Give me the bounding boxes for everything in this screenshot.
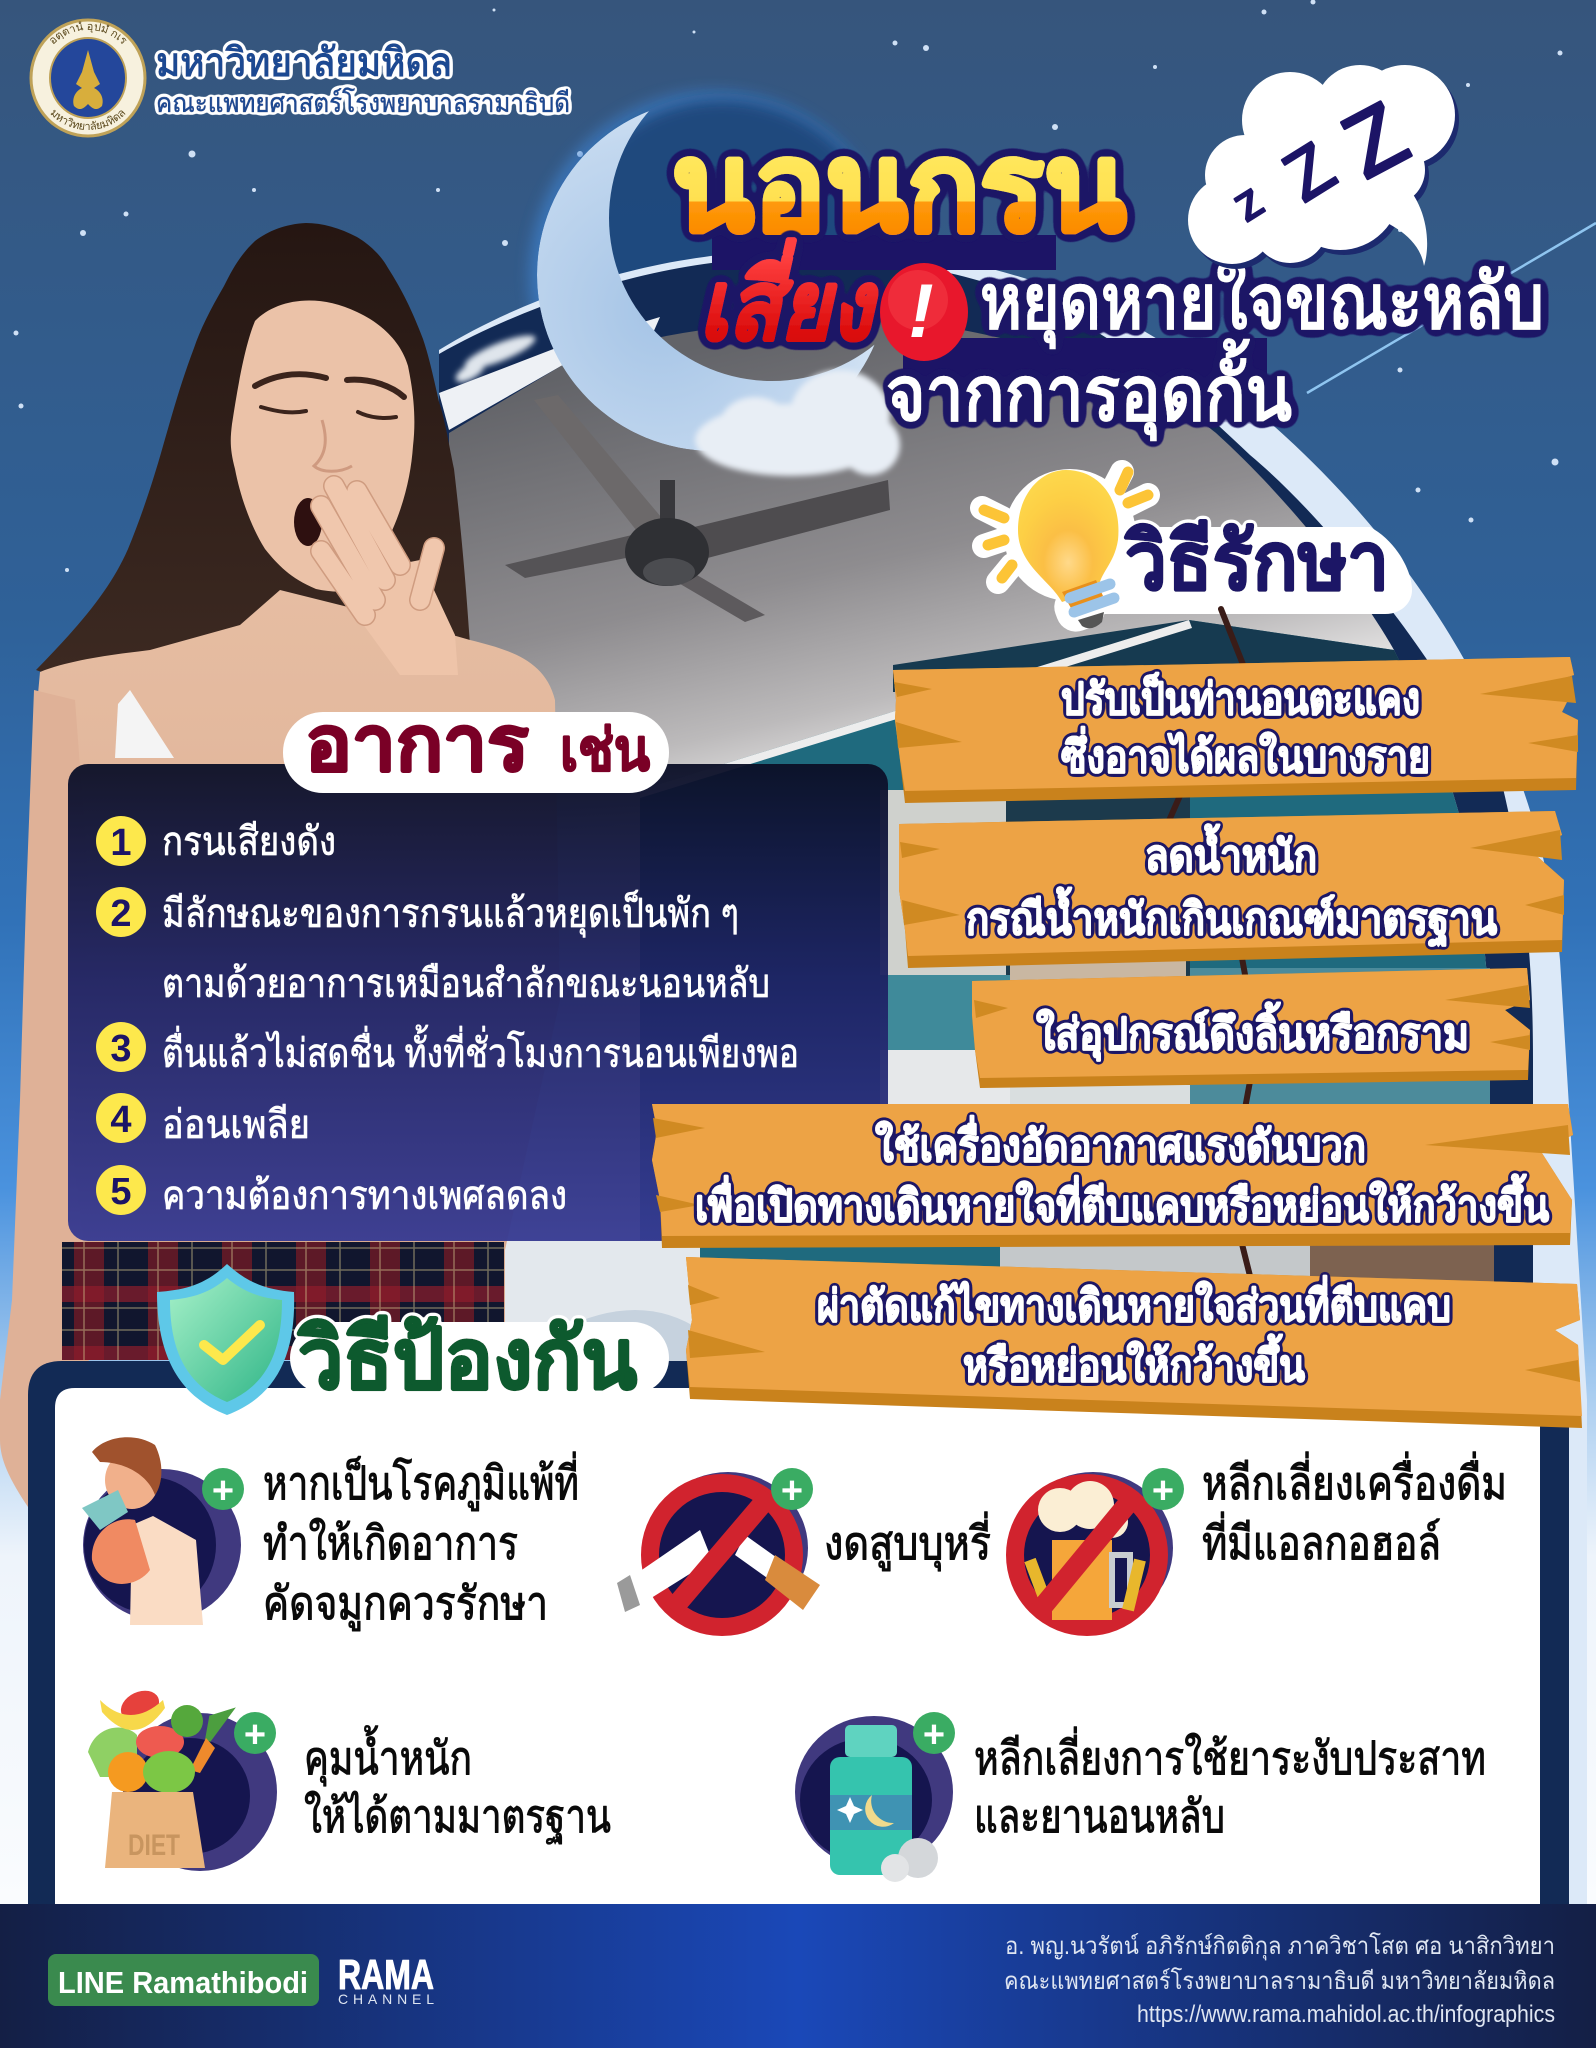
symptom 5: ความต้องการทางเพศลดลง — [162, 1174, 567, 1218]
rama channel logo: RAMA — [338, 1951, 434, 1998]
plank 4 — [652, 1104, 1573, 1248]
footer credits: คณะแพทยศาสตร์โรงพยาบาลรามาธิบดี มหาวิทยาลัยมหิดล — [1004, 1967, 1555, 1995]
prevention item: no smoking: งดสูบบุหรี่ — [824, 1511, 991, 1572]
hair back — [36, 223, 470, 690]
top — [115, 690, 174, 758]
hand — [321, 486, 458, 675]
icon: exclamation: ! — [908, 269, 934, 354]
symptom 5: 5 — [110, 1171, 132, 1213]
thought cloud with zzz: Z — [1328, 84, 1423, 198]
plank 3: ใส่อุปกรณ์ดึงลิ้นหรือกราม — [1036, 1001, 1469, 1062]
plank 5: หรือหย่อนให้กว้างขึ้น — [963, 1333, 1305, 1391]
symptom 2: ตามด้วยอาการเหมือนสำลักขณะนอนหลับ — [162, 962, 770, 1006]
logo: อตฺตานํ อุปมํ กเร — [50, 22, 126, 44]
moon — [537, 99, 889, 451]
symptom 3: ตื่นแล้วไม่สดชื่น ทั้งที่ชั่วโมงการนอนเพียงพอ — [162, 1024, 799, 1076]
shooting star — [1307, 223, 1596, 393]
rama channel logo — [338, 1951, 434, 2007]
title: เสี่ยง — [699, 238, 878, 360]
plank 3 — [972, 968, 1530, 1088]
icon: diet bag: DIET — [128, 1829, 180, 1862]
prevention item: allergy: + — [212, 1470, 234, 1512]
title: นอนกรน — [672, 119, 1126, 257]
body and shoulders — [30, 590, 560, 1360]
symptom 5 — [96, 1165, 567, 1218]
mouth — [294, 498, 322, 546]
symptom 2 — [96, 887, 770, 1006]
symptoms heading — [283, 702, 669, 793]
ceiling and room scene — [449, 320, 1494, 1400]
stars — [14, 0, 1562, 572]
heading: prevention — [157, 1264, 669, 1415]
plank 2: ลดน้ำหนัก — [1145, 823, 1317, 881]
plank 1 — [893, 657, 1578, 803]
ceiling fan — [505, 395, 890, 622]
icon: shield — [157, 1264, 294, 1415]
eyebrows — [255, 374, 404, 397]
plank 1: ปรับเป็นท่านอนตะแคง — [1061, 672, 1420, 724]
panel: symptoms — [68, 702, 888, 1241]
prevention item: avoid sedatives — [795, 1712, 1486, 1882]
logo — [30, 18, 146, 138]
prevention item: avoid sedatives: + — [923, 1714, 945, 1756]
face — [231, 300, 414, 592]
plank 2: กรณีน้ำหนักเกินเกณฑ์มาตรฐาน — [966, 886, 1497, 947]
prevention item: no alcohol — [1013, 1451, 1507, 1627]
prevention item: allergy — [82, 1437, 579, 1631]
icon: diet bag — [88, 1685, 277, 1871]
symptom 1 — [96, 816, 336, 866]
footer band — [0, 1904, 1596, 2048]
footer credits: https://www.rama.mahidol.ac.th/infographics — [1137, 2001, 1555, 2028]
prevention item: no alcohol: หลีกเลี่ยงเครื่องดื่ม — [1202, 1451, 1507, 1509]
symptoms heading: เช่น — [560, 718, 650, 783]
symptom 3: 3 — [110, 1028, 132, 1070]
prevention item: allergy: คัดจมูกควรรักษา — [263, 1577, 548, 1631]
prevention item: allergy: ทำให้เกิดอาการ — [263, 1517, 518, 1569]
prevention item: avoid sedatives: และยานอนหลับ — [974, 1790, 1225, 1842]
university name — [156, 41, 570, 118]
footer credits — [1004, 1932, 1555, 2028]
prevention item: no alcohol: ที่มีแอลกอฮอล์ — [1202, 1511, 1441, 1569]
prevention item: no smoking — [617, 1468, 991, 1627]
icon: exclamation — [880, 263, 968, 361]
icon: no alcohol — [1013, 1472, 1173, 1627]
moon halo — [529, 91, 897, 459]
title block backing — [712, 235, 1267, 378]
eyes — [261, 407, 396, 418]
logo: มหาวิทยาลัยมหิดล — [50, 110, 126, 130]
thought cloud with zzz: z — [1222, 171, 1273, 232]
footer credits: อ. พญ.นวรัตน์ อภิรักษ์กิตติกุล ภาควิชาโสต ศอ นาสิกวิทยา — [1005, 1932, 1555, 1961]
prevention item: no smoking: + — [781, 1470, 803, 1512]
prevention item: weight control — [88, 1685, 611, 1871]
plank 1: ซึ่งอาจได้ผลในบางราย — [1061, 726, 1430, 782]
woman yawning — [0, 223, 560, 1507]
title — [672, 119, 1544, 442]
heading: prevention: วิธีป้องกัน — [296, 1312, 637, 1406]
symptom 2: มีลักษณะของการกรนแล้วหยุดเป็นพัก ๆ — [162, 889, 739, 938]
university name: มหาวิทยาลัยมหิดล — [156, 41, 452, 85]
plank 4: ใช้เครื่องอัดอากาศแรงดันบวก — [875, 1115, 1366, 1171]
symptom 4: อ่อนเพลีย — [162, 1103, 310, 1147]
symptom 3 — [96, 1022, 799, 1076]
prevention item: weight control: + — [244, 1714, 266, 1756]
heading: treatment — [982, 469, 1412, 637]
plank 2 — [899, 811, 1564, 968]
cloud under moon — [695, 370, 900, 476]
prevention item: weight control: คุมน้ำหนัก — [304, 1725, 472, 1787]
nose — [314, 420, 352, 471]
prevention item: avoid sedatives: หลีกเลี่ยงการใช้ยาระงับประสาท — [974, 1726, 1486, 1784]
prevention item: allergy: หากเป็นโรคภูมิแพ้ที่ — [263, 1451, 579, 1511]
panel: prevention — [28, 1361, 1569, 1905]
thought cloud with zzz: Z — [1270, 127, 1348, 216]
rama channel logo: CHANNEL — [338, 1991, 434, 2007]
connector posts — [1164, 609, 1253, 1276]
icon: light bulb — [982, 469, 1148, 637]
line badge — [48, 1954, 319, 2006]
icon: sneezing man — [82, 1437, 241, 1625]
thought cloud with zzz — [1188, 65, 1459, 269]
icon: medicine bottle — [795, 1716, 953, 1882]
prevention item: weight control: ให้ได้ตามมาตรฐาน — [304, 1790, 611, 1844]
icon: no smoking — [617, 1472, 820, 1627]
skirt — [62, 1242, 504, 1360]
university name: คณะแพทยศาสตร์โรงพยาบาลรามาธิบดี — [156, 87, 570, 118]
symptom 4: 4 — [110, 1099, 132, 1141]
symptom 1: กรนเสียงดัง — [162, 820, 336, 864]
line badge: LINE Ramathibodi — [58, 1965, 308, 2000]
plank 5 — [686, 1257, 1582, 1428]
arch frame — [439, 248, 1587, 1905]
heading: treatment: วิธีรักษา — [1124, 517, 1389, 606]
prevention item: no alcohol: + — [1152, 1470, 1174, 1512]
left arm — [0, 690, 95, 1507]
title: จากการอุดกั้น — [886, 338, 1292, 442]
symptom 2: 2 — [110, 893, 132, 935]
symptom 1: 1 — [110, 822, 132, 864]
symptom 4 — [96, 1093, 310, 1147]
symptoms heading: อาการ — [305, 702, 529, 787]
plank 5: ผ่าตัดแก้ไขทางเดินหายใจส่วนที่ตีบแคบ — [817, 1275, 1451, 1331]
